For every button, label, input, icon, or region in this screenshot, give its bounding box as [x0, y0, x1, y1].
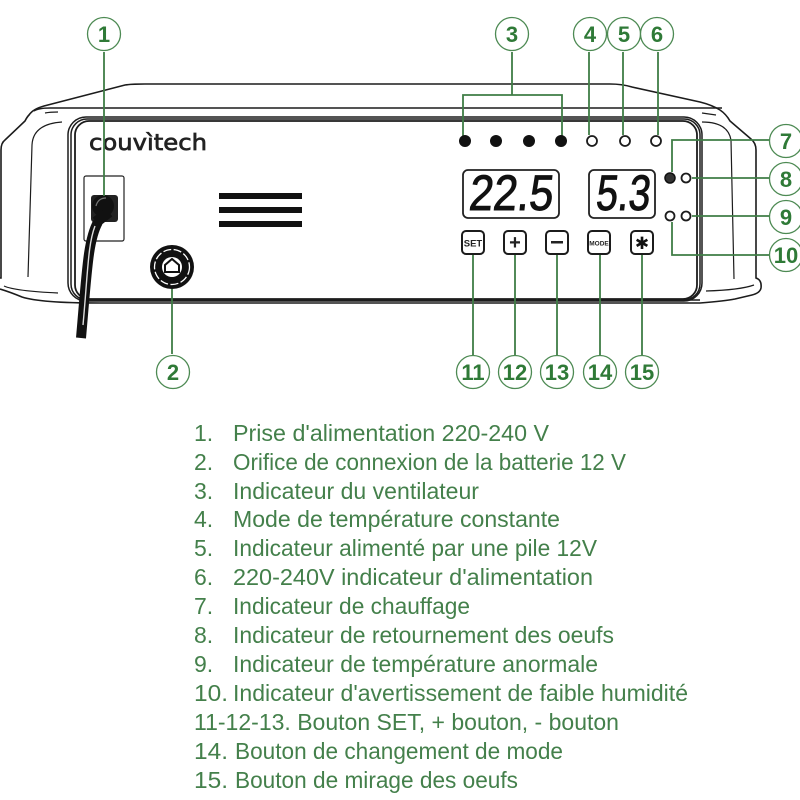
status LEDs [587, 136, 690, 220]
label 12 [498, 356, 532, 388]
legend list: 1. [194, 420, 213, 446]
label 4 [574, 18, 606, 50]
label 14 [584, 356, 616, 388]
label 15 [626, 356, 658, 388]
button SET [462, 231, 484, 254]
label 11: 11 [461, 360, 485, 385]
legend list: Orifice de connexion de la batterie 12 V [233, 449, 627, 475]
legend list: 8. [194, 622, 213, 648]
legend list: Indicateur alimenté par une pile 12V [233, 535, 598, 561]
label 1 [88, 18, 120, 50]
label 5 [608, 18, 640, 50]
leader lines [104, 52, 770, 355]
fan indicators [459, 135, 567, 147]
legend list: Indicateur d'avertissement de faible humidité [233, 680, 688, 706]
label 10 [770, 238, 800, 272]
legend list: 6. [194, 564, 213, 590]
label 4: 4 [584, 22, 597, 47]
label 9 [770, 200, 800, 234]
label 8: 8 [780, 167, 792, 192]
label 2 [156, 356, 190, 388]
label 7: 7 [780, 129, 792, 154]
legend list: 3. [194, 478, 213, 504]
label 9: 9 [780, 205, 792, 230]
legend list: 11-12-13. Bouton SET, + bouton, - bouton [194, 709, 619, 735]
legend list: 7. [194, 593, 213, 619]
label 12: 12 [503, 360, 527, 385]
legend list: Indicateur du ventilateur [233, 478, 479, 504]
legend list: 4. [194, 506, 213, 532]
legend list: 14. [194, 738, 228, 764]
label 3: 3 [506, 22, 518, 47]
ventilation slots [219, 193, 302, 227]
label 8 [770, 162, 800, 196]
label 7 [770, 124, 800, 158]
button candling [631, 231, 653, 254]
legend list: Bouton de changement de mode [235, 738, 563, 764]
temperature display: 22.5 [467, 165, 557, 221]
label 14: 14 [588, 360, 613, 385]
legend list: Indicateur de retournement des oeufs [233, 622, 614, 648]
device housing [0, 84, 761, 303]
button candling: ✱ [635, 234, 649, 254]
label 11 [456, 356, 490, 388]
button plus [504, 231, 526, 254]
button SET: SET [464, 238, 482, 250]
button plus: + [509, 232, 521, 254]
legend list: 10. [194, 680, 228, 706]
legend list: 9. [194, 651, 213, 677]
button MODE: MODE [589, 240, 609, 248]
legend list: Indicateur de chauffage [233, 593, 470, 619]
button minus [546, 231, 568, 254]
button MODE [588, 231, 610, 254]
label 3 [496, 18, 528, 50]
battery connector [150, 245, 194, 289]
legend list: Prise d'alimentation 220-240 V [233, 420, 550, 446]
legend list: 5. [194, 535, 213, 561]
label 6: 6 [651, 22, 663, 47]
legend list: 15. [194, 767, 228, 793]
label 13 [540, 356, 574, 388]
label 5: 5 [618, 22, 630, 47]
label 10: 10 [774, 243, 798, 268]
legend list: 220-240V indicateur d'alimentation [233, 564, 593, 590]
power socket and cable [81, 176, 124, 338]
humidity display: 5.3 [594, 165, 654, 221]
label 6 [640, 18, 674, 50]
front panel [68, 117, 702, 301]
legend list: Bouton de mirage des oeufs [235, 767, 518, 793]
label 13: 13 [545, 360, 569, 385]
legend list: Mode de température constante [233, 506, 560, 532]
legend list: Indicateur de température anormale [233, 651, 598, 677]
legend list: 2. [194, 449, 213, 475]
legend list [194, 420, 688, 793]
label 15: 15 [630, 360, 654, 385]
brand logo: couvìtech [89, 131, 207, 156]
label 2: 2 [167, 360, 179, 385]
label 1: 1 [98, 22, 110, 47]
